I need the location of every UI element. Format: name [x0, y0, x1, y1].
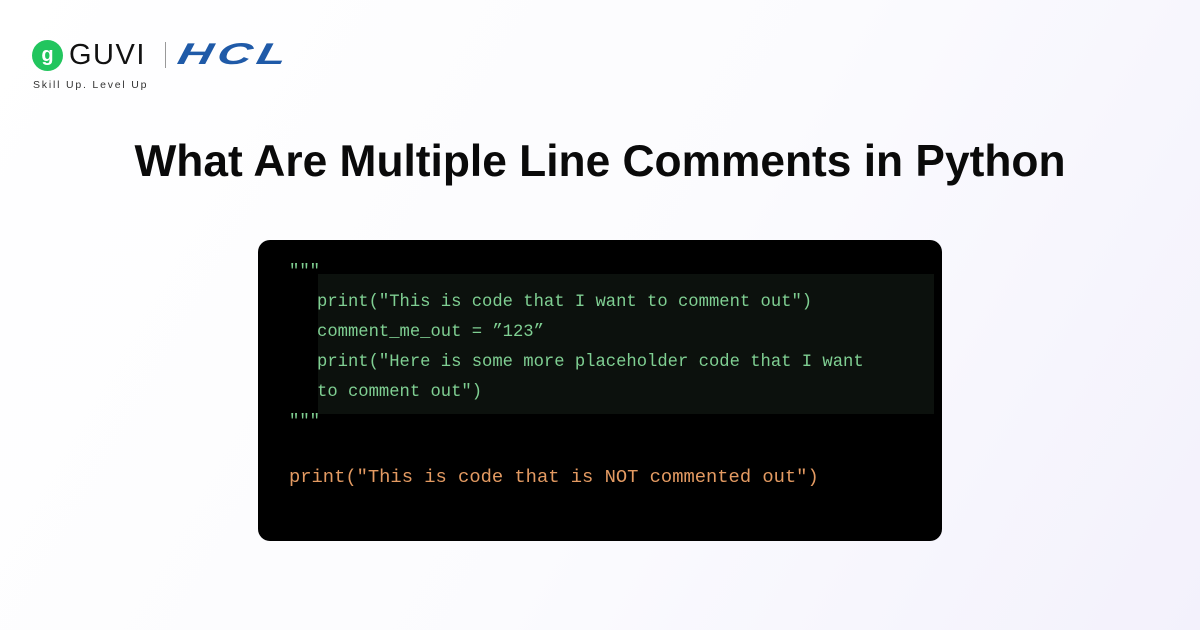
code: active line: print("This is code that is NOT commented out") — [289, 466, 819, 488]
panel: code block — [258, 240, 942, 541]
hcl wordmark: HCL — [175, 38, 295, 71]
guvi wordmark: GUVI — [69, 39, 146, 71]
logo — [32, 38, 295, 91]
highlight region — [318, 274, 934, 414]
code: commented block: """ print("This is code that I want to comment out") comment_me_out = ”123” print("Here is some more placeholder code that I want to comment out") """ — [289, 263, 864, 432]
icon: guvi circle — [32, 40, 63, 71]
tagline: Skill Up. Level Up — [33, 79, 148, 91]
title: What Are Multiple Line Comments in Python — [134, 137, 1066, 186]
icon: guvi circle: g — [41, 44, 54, 66]
